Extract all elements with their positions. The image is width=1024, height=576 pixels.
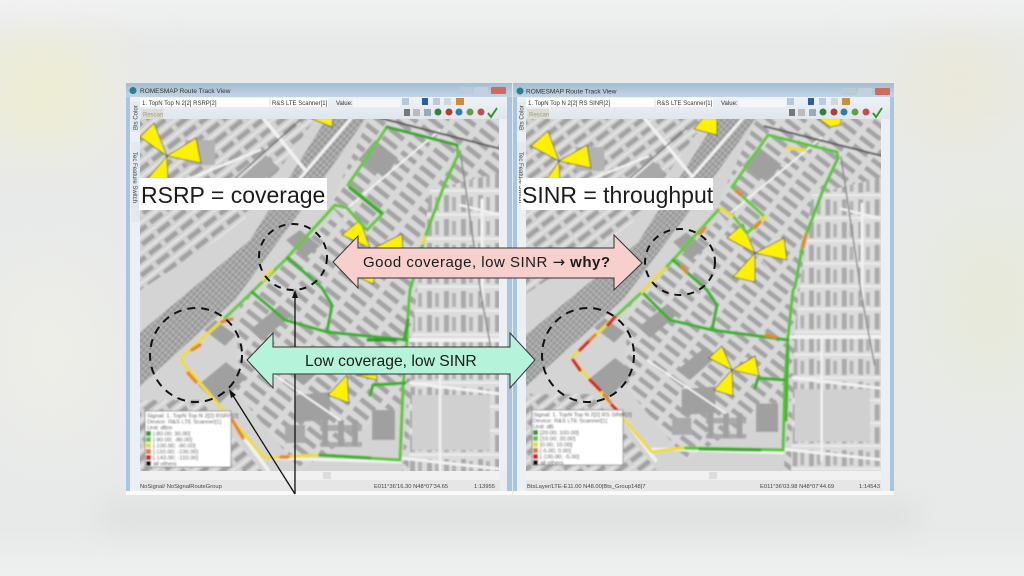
legend SINR [532,410,632,466]
toolbar RSRP [130,97,507,119]
status bar RSRP [140,471,507,491]
legend RSRP: Unit: dBm [147,426,173,432]
title bar RSRP: ROMESMAP Route Track View [140,88,231,95]
title bar SINR: ROMESMAP Route Track View [526,88,617,96]
legend RSRP: [-110.00; -100.00] [153,450,199,456]
legend SINR: Unit: dB [533,424,554,430]
dashed circle: left top [259,224,327,290]
arrow: good coverage, low SINR [333,235,642,290]
title bar SINR [516,88,890,96]
window: RSRP route track view [125,83,512,495]
antenna sectors SINR [531,118,842,396]
status bar SINR: E011°36'03.98 N48°07'44.69 [760,484,834,490]
arrow: low coverage, low SINR [247,333,535,388]
legend SINR: [-5.00; 0.00] [540,448,571,454]
status bar RSRP: 1:13955 [474,484,495,490]
side tabs SINR: Tec Feature Switch [517,152,523,203]
status bar SINR [526,471,890,491]
side tabs RSRP: Bts Color [134,105,140,130]
arrow: good coverage, low SINR: Good coverage, low SINR → why? [363,253,610,271]
toolbar SINR: 1. TopN Top N 2[2] RS SINR[2] [528,101,610,107]
legend SINR: Signal: 1. TopN Top N 2[2] RS SINR[2] [533,412,632,418]
label: SINR = throughput: SINR = throughput [522,182,714,208]
status bar RSRP: E011°36'16.30 N48°07'34.65 [374,484,448,490]
toolbar SINR: R&S LTE Scanner[1] [657,101,713,107]
legend RSRP: [-80.00; 30.00] [153,432,191,438]
legend RSRP: [-100.00; -90.00] [153,444,196,450]
legend SINR: [0.00; 10.00] [540,442,573,448]
title bar RSRP [130,87,506,95]
toolbar SINR [517,97,890,119]
antenna sectors RSRP [140,118,403,403]
toolbar RSRP: 1. TopN Top N 2[2] RSRP[2] [142,101,217,107]
legend RSRP: [-143.00; -110.00] [153,456,199,462]
toolbar RSRP: R&S LTE Scanner[1] [272,101,328,107]
label: RSRP = coverage: RSRP = coverage [141,182,325,208]
legend RSRP: Device: R&S LTE Scanner[1] [147,420,222,426]
route SINR [572,135,838,452]
toolbar RSRP: Rescan [143,112,163,118]
toolbar SINR: Value: [721,101,738,107]
side tabs SINR: Bts Color [520,105,526,130]
legend RSRP: Signal: 1. TopN Top N 2[2] RSRP[2] [147,414,239,420]
legend RSRP: [-90.00; -80.00] [153,438,193,444]
arrow: vertical pointer [292,290,298,494]
window: SINR route track view [513,83,894,495]
side tabs RSRP [131,102,140,222]
status bar SINR: 1:14543 [859,484,880,490]
route RSRP [182,127,458,460]
legend SINR: [10.00; 20.00] [540,436,576,442]
legend SINR: [20.00; 100.00] [540,430,579,436]
legend SINR: all others [540,460,564,466]
dashed circle: right top [645,229,715,295]
side tabs RSRP: Tec Feature Switch [131,152,137,203]
status bar RSRP: NoSignal/ NoSignalRouteGroup [140,484,222,490]
legend SINR: [-100.00; -5.00] [540,454,580,460]
toolbar SINR: Rescan [529,112,549,118]
status bar SINR: BtsLayer/LTE-E11.00 N48.00|Bts_Group148|7 [527,484,645,490]
toolbar RSRP: Value: [336,101,353,107]
dashed circle: left bottom [150,308,242,402]
legend RSRP: all others [153,462,177,468]
legend SINR: Device: R&S LTE Scanner[1] [533,418,608,424]
map: SINR [518,114,889,480]
dashed circle: right bottom [542,308,634,402]
arrow: low coverage, low SINR: Low coverage, low SINR [305,353,477,370]
legend RSRP [145,411,239,468]
arrow: diagonal pointer [229,389,295,494]
side tabs SINR [517,102,526,203]
map: RSRP [140,119,499,471]
